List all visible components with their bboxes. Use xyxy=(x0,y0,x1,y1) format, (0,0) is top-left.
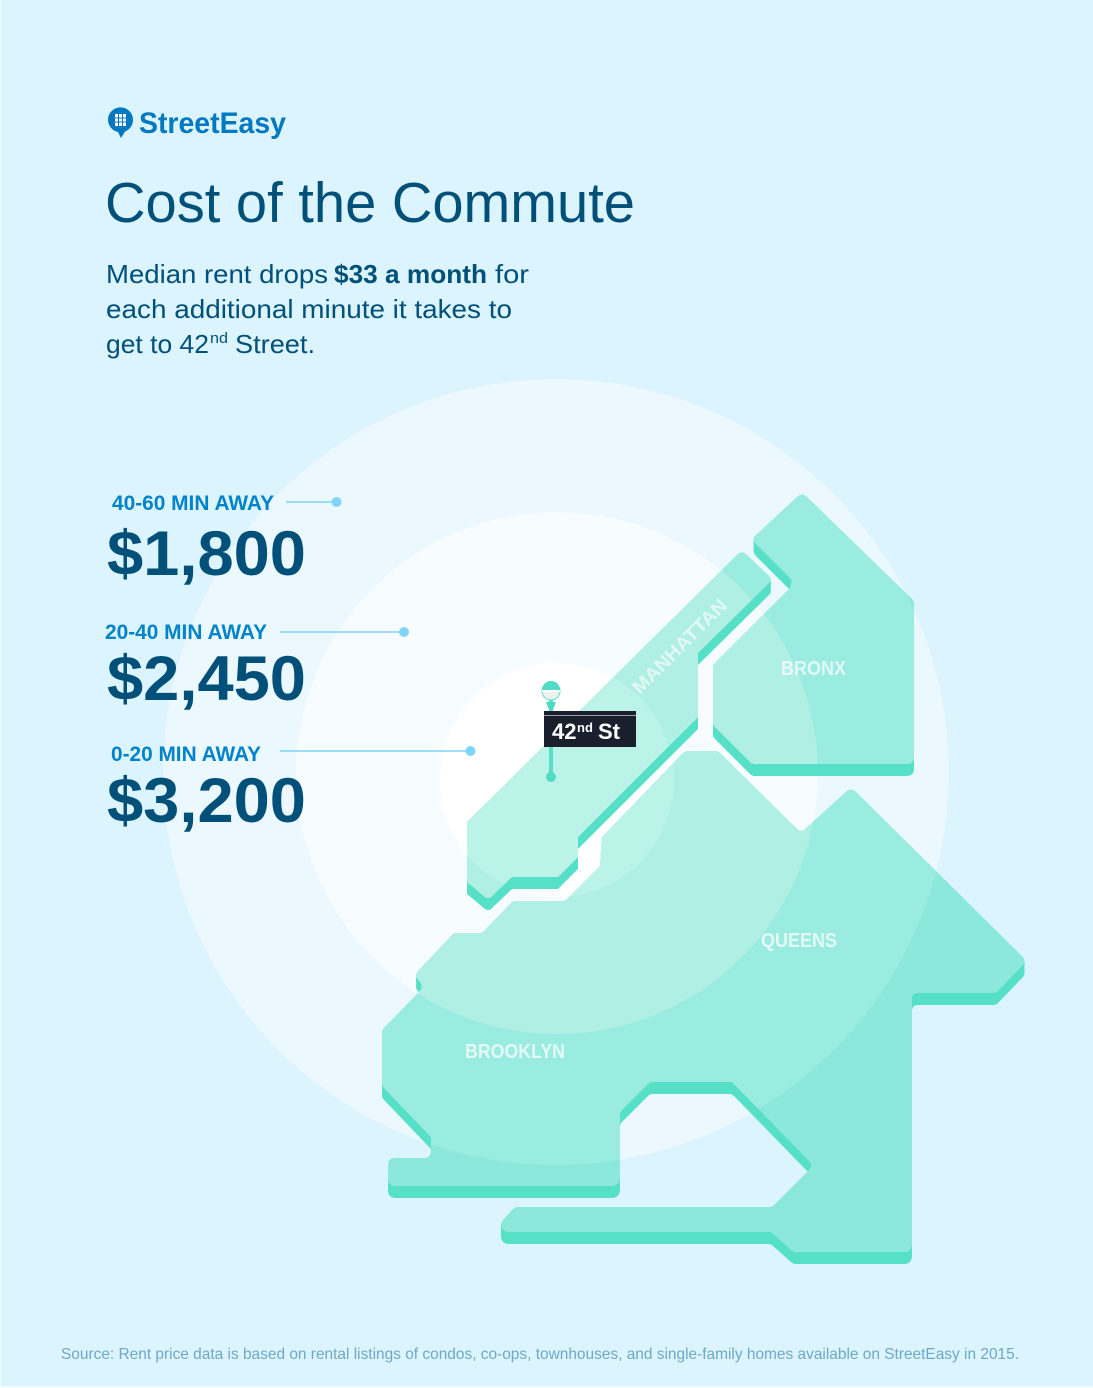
sign text: 42 xyxy=(552,719,576,744)
title: Cost of the Commute xyxy=(105,171,635,235)
leader line xyxy=(280,746,476,756)
logo bubble icon xyxy=(108,107,133,138)
sign board xyxy=(544,711,636,747)
pole base xyxy=(546,772,556,782)
subway sign: 42nd St: nd xyxy=(577,720,593,735)
subtitle: for xyxy=(495,259,529,289)
borough surfaces xyxy=(382,494,1024,1252)
subway sign: 42nd St xyxy=(542,681,636,782)
price: $3,200 xyxy=(107,766,306,836)
map of boroughs xyxy=(382,494,1024,1264)
ring tint on boroughs xyxy=(382,494,936,1165)
subtitle: Median rent drops xyxy=(106,259,328,289)
tier label: 0-20 MIN AWAY xyxy=(111,743,261,766)
label: Queens: QUEENS xyxy=(761,930,837,952)
label: Bronx: BRONX xyxy=(781,658,847,680)
tier label: 20-40 MIN AWAY xyxy=(105,621,267,644)
price tier: 0-20 min xyxy=(107,743,476,836)
subtitle: Street. xyxy=(235,329,315,359)
borough 3D shadow edges xyxy=(382,496,1024,1264)
price tier: 40-60 min xyxy=(107,492,342,589)
subtitle: each additional minute it takes to xyxy=(106,294,512,324)
source note: Source: Rent price data is based on rental listings of condos, co-ops, townhouses, and single-family homes available on StreetEasy in 2015. xyxy=(61,1346,1019,1363)
subtitle: $33 a month xyxy=(334,259,487,289)
price: $2,450 xyxy=(107,644,306,714)
price tier: 20-40 min xyxy=(105,621,409,714)
globe lamp xyxy=(542,681,560,710)
leader line xyxy=(280,627,409,637)
subtitle xyxy=(106,259,529,359)
tier label: 40-60 MIN AWAY xyxy=(112,492,274,515)
label: Brooklyn: BROOKLYN xyxy=(465,1041,565,1063)
subtitle: nd xyxy=(210,330,228,347)
leader line xyxy=(286,497,342,507)
logo: StreetEasy xyxy=(108,107,286,140)
sign pole xyxy=(549,700,553,777)
subtitle: get to 42 xyxy=(106,329,209,359)
commute radius rings xyxy=(163,379,949,1165)
price: $1,800 xyxy=(107,519,306,589)
subway sign: 42nd St: St xyxy=(598,719,621,744)
logo wordmark: StreetEasy xyxy=(139,107,286,140)
label: Manhattan: MANHATTAN xyxy=(629,595,732,699)
